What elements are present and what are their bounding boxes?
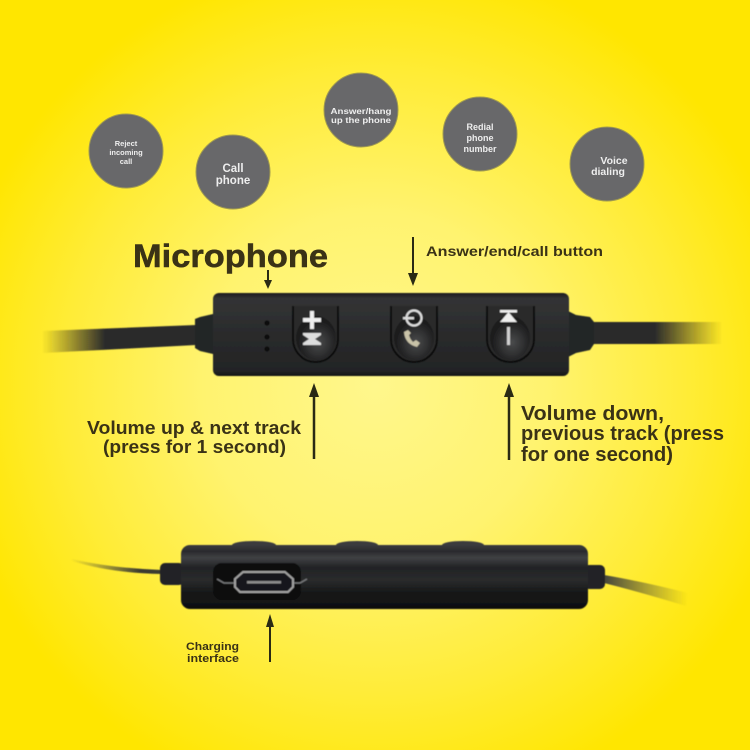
label: volume up and next track: Volume up & next track: [87, 418, 302, 438]
circle: redial phone number: Redial: [466, 122, 494, 132]
collar right: [566, 310, 594, 358]
label: volume down and previous track: previous track (press: [521, 423, 724, 445]
button: volume down: [487, 306, 534, 362]
cable left: [42, 325, 196, 353]
label: volume up and next track: [87, 418, 302, 457]
recess notches: [217, 579, 307, 583]
label: volume down and previous track: Volume down,: [521, 403, 664, 425]
label: charging interface: interface: [187, 653, 239, 665]
label: volume down and previous track: for one second): [521, 444, 673, 466]
heading: microphone: Microphone: [133, 238, 328, 274]
cable right: [590, 322, 722, 344]
arrow: volume down: [504, 383, 514, 460]
collars: [160, 563, 184, 585]
circle: voice dialing: [570, 127, 644, 201]
circle: redial phone number: [443, 97, 517, 171]
button: volume up: [293, 306, 338, 362]
body: [213, 293, 569, 376]
microphone dots: [264, 320, 270, 352]
circle: reject incoming call: Reject: [115, 139, 138, 148]
circle: voice dialing: Voice: [600, 155, 628, 167]
circle: redial phone number: phone: [466, 133, 494, 143]
collar left: [195, 314, 213, 354]
port recess: [213, 563, 301, 600]
circle: reject incoming call: incoming: [109, 148, 143, 157]
body: [181, 545, 588, 609]
arrow: microphone: [264, 270, 272, 289]
circle: call phone: Call: [222, 163, 244, 175]
circle: call phone: phone: [216, 175, 250, 187]
label: answer end call button: Answer/end/call button: [426, 243, 603, 259]
cable left: [72, 559, 162, 574]
remote control front view: [42, 293, 722, 376]
micro usb port: [235, 572, 293, 592]
remote control side view with charging port: [72, 541, 688, 609]
circle: answer / hang up the phone: Answer/hang: [330, 106, 392, 116]
label: volume down and previous track: [521, 403, 724, 466]
circle: call phone: [196, 135, 270, 209]
circle: redial phone number: number: [463, 144, 497, 154]
arrow: volume up: [309, 383, 319, 459]
cable right: [604, 575, 688, 606]
button: call: [391, 306, 437, 362]
arrow: answer button: [408, 237, 418, 286]
top buttons: [232, 541, 276, 549]
circle: answer / hang up the phone: up the phone: [331, 115, 391, 125]
arrow: charging interface: [266, 614, 274, 662]
label: volume up and next track: (press for 1 second): [103, 437, 286, 457]
circle: voice dialing: dialing: [591, 166, 625, 178]
circle: reject incoming call: call: [120, 157, 132, 166]
circle: answer / hang up the phone: [324, 73, 398, 147]
label: charging interface: Charging: [186, 641, 239, 653]
circle: reject incoming call: [89, 114, 163, 188]
label: charging interface: [186, 641, 239, 665]
